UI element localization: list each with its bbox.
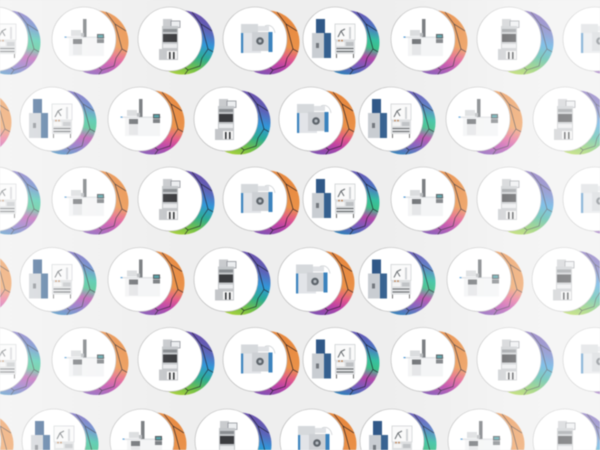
badge row 4: gas chromatograph xyxy=(108,248,185,318)
badge row 6: gas chromatograph xyxy=(448,409,525,450)
badge row 6: dual system xyxy=(360,409,437,450)
badge row 6: liquid chromatograph xyxy=(533,409,600,450)
badge row 2: liquid chromatograph xyxy=(194,87,271,157)
badge row 1: gas chromatograph xyxy=(391,7,468,77)
badge row 6: dual system xyxy=(22,409,99,450)
badge row 4: liquid chromatograph xyxy=(194,248,271,318)
badge row 5: mass spectrometer xyxy=(223,328,300,398)
badge row 2: gas chromatograph xyxy=(108,87,185,157)
badge row 4: dual system xyxy=(20,248,97,318)
badge row 2: mass spectrometer xyxy=(0,87,12,157)
badge row 4: mass spectrometer xyxy=(0,248,12,318)
badge row 3: mass spectrometer xyxy=(223,167,300,237)
badge row 5: dual system xyxy=(0,328,41,398)
badge row 5: dual system xyxy=(303,328,380,398)
badge row 5: gas chromatograph xyxy=(52,328,129,398)
badge row 2: liquid chromatograph xyxy=(533,87,600,157)
badge row 4: liquid chromatograph xyxy=(532,248,600,318)
badge row 2: dual system xyxy=(20,87,97,157)
badge row 3: gas chromatograph xyxy=(391,167,468,237)
badge row 3: gas chromatograph xyxy=(52,167,129,237)
badge row 1: dual system xyxy=(0,7,41,77)
badge row 2: dual system xyxy=(359,87,436,157)
badge row 1: mass spectrometer xyxy=(223,7,300,77)
badge row 2: mass spectrometer xyxy=(279,87,356,157)
badge row 5: liquid chromatograph xyxy=(477,328,554,398)
badge row 1: gas chromatograph xyxy=(52,7,129,77)
badge row 5: gas chromatograph xyxy=(391,328,468,398)
badge row 3: dual system xyxy=(303,167,380,237)
badge row 6: liquid chromatograph xyxy=(195,409,272,450)
badge row 1: dual system xyxy=(303,7,380,77)
badge row 5: liquid chromatograph xyxy=(138,328,215,398)
badge row 6: mass spectrometer xyxy=(280,409,357,450)
badge row 1: liquid chromatograph xyxy=(138,7,215,77)
badge row 1: mass spectrometer xyxy=(563,7,600,77)
badge row 3: liquid chromatograph xyxy=(477,167,554,237)
badge row 3: mass spectrometer xyxy=(563,167,600,237)
badge row 2: gas chromatograph xyxy=(446,87,523,157)
badge row 4: mass spectrometer xyxy=(278,248,355,318)
badge row 6: gas chromatograph xyxy=(110,409,187,450)
badge row 1: liquid chromatograph xyxy=(477,7,554,77)
badge row 6: mass spectrometer xyxy=(0,409,14,450)
badge row 5: mass spectrometer xyxy=(563,328,600,398)
badge row 4: gas chromatograph xyxy=(447,248,524,318)
badge row 3: dual system xyxy=(0,167,41,237)
badge row 3: liquid chromatograph xyxy=(138,167,215,237)
badge row 4: dual system xyxy=(359,248,436,318)
